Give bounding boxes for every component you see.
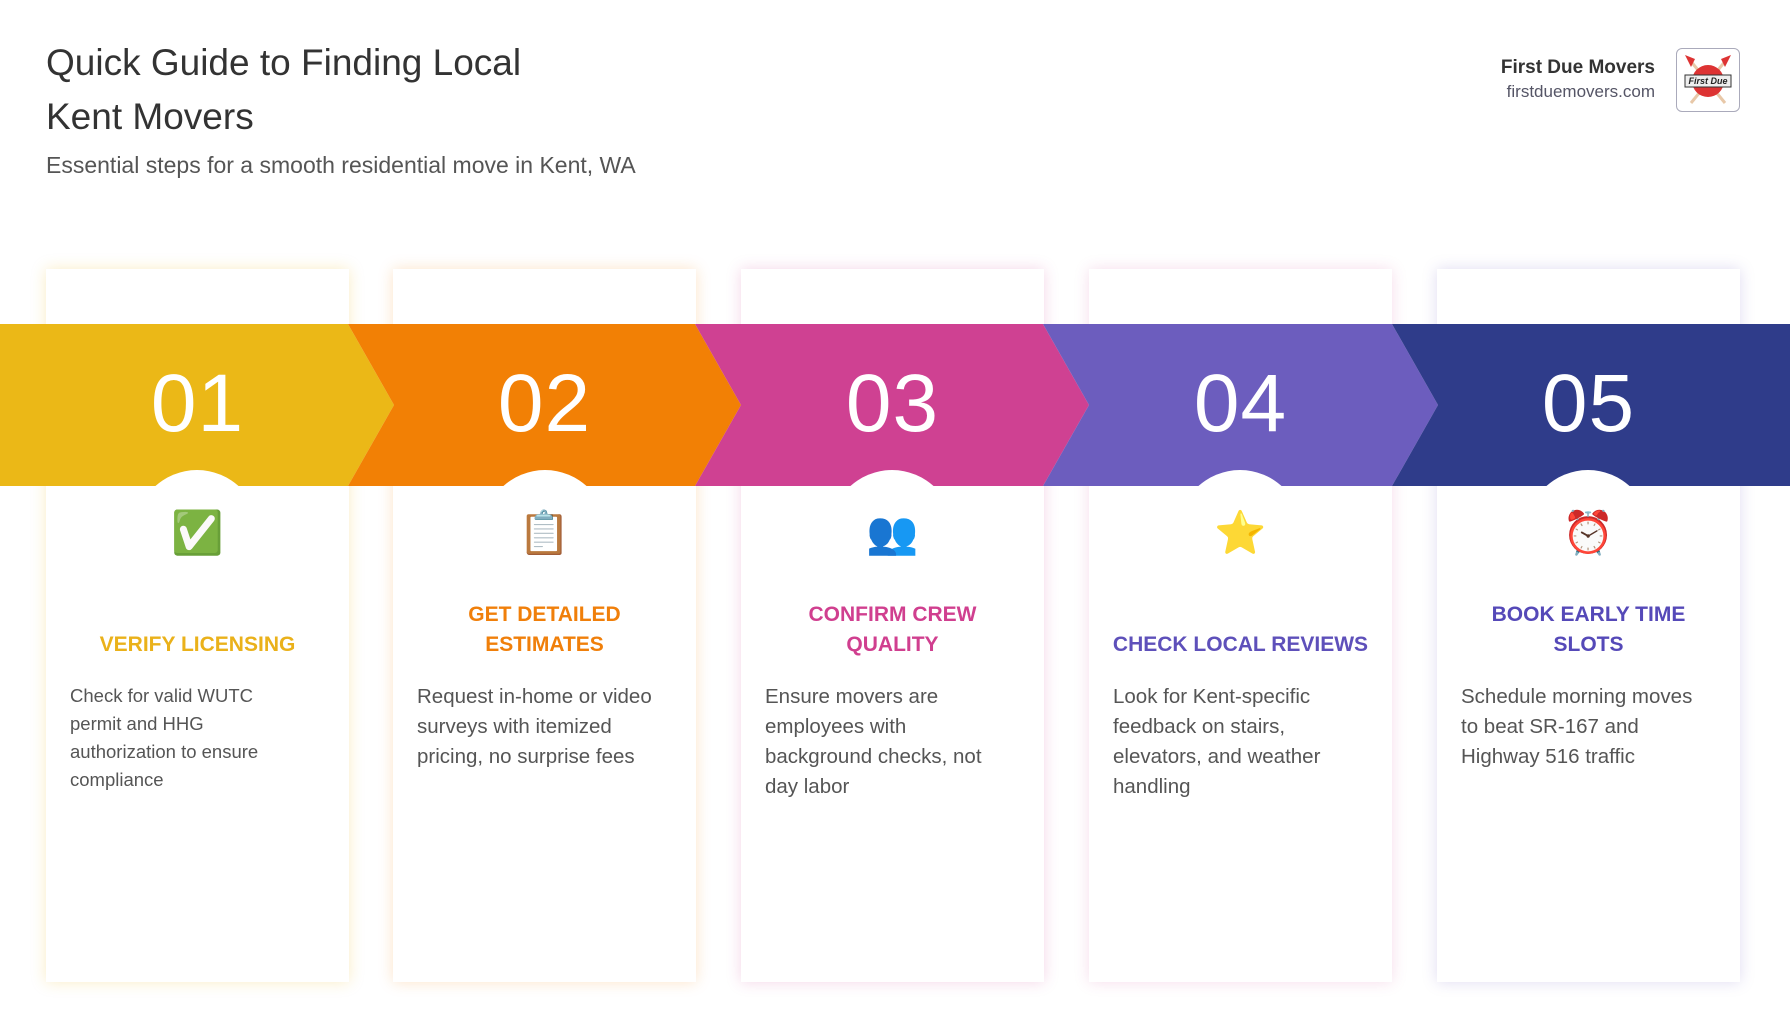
brand block: First Due Movers [1501, 57, 1655, 78]
card 5 [1437, 269, 1740, 982]
brand block [1501, 57, 1655, 101]
title [46, 42, 521, 137]
brand block: firstduemovers.com [1507, 82, 1655, 101]
chevron band [0, 324, 1790, 486]
step 3: 👥 [866, 509, 919, 556]
step 3: Ensure movers are employees with background checks, not day labor [765, 685, 982, 798]
step 1: VERIFY LICENSING [100, 633, 295, 656]
step 4: 04 [1194, 358, 1287, 449]
card 3 [741, 269, 1044, 982]
step 5 [1461, 358, 1692, 768]
step 3: CONFIRM CREW QUALITY [808, 603, 976, 656]
step 4: CHECK LOCAL REVIEWS [1113, 633, 1368, 656]
title: Quick Guide to Finding Local [46, 42, 521, 83]
step 5: Schedule morning moves to beat SR-167 and Highway 516 traffic [1461, 685, 1692, 768]
step 4: ⭐ [1214, 509, 1267, 556]
step 1: Check for valid WUTC permit and HHG authorization to ensure compliance [70, 685, 258, 790]
step 2: 02 [498, 358, 591, 449]
step 1: ✅ [171, 509, 224, 556]
step 3: 03 [846, 358, 939, 449]
card 4 [1089, 269, 1392, 982]
card 2 [393, 269, 696, 982]
step 3 [765, 358, 982, 798]
icon: logo [1676, 48, 1740, 112]
step 5: 05 [1542, 358, 1635, 449]
step 2: 📋 [518, 509, 571, 556]
step 2: GET DETAILED ESTIMATES [468, 603, 621, 656]
step 5: ⏰ [1562, 509, 1615, 556]
card 1 [46, 269, 349, 982]
title: Kent Movers [46, 96, 254, 137]
step 2 [417, 358, 652, 768]
step 5: BOOK EARLY TIME SLOTS [1492, 603, 1685, 656]
step 1 [70, 358, 295, 790]
step 4 [1113, 358, 1368, 798]
subtitle: Essential steps for a smooth residential move in Kent, WA [46, 152, 636, 178]
step 2: Request in-home or video surveys with itemized pricing, no surprise fees [417, 685, 652, 768]
icon: logo: First Due [1688, 76, 1728, 86]
step 1: 01 [151, 358, 244, 449]
step 4: Look for Kent-specific feedback on stairs, elevators, and weather handling [1113, 685, 1320, 798]
